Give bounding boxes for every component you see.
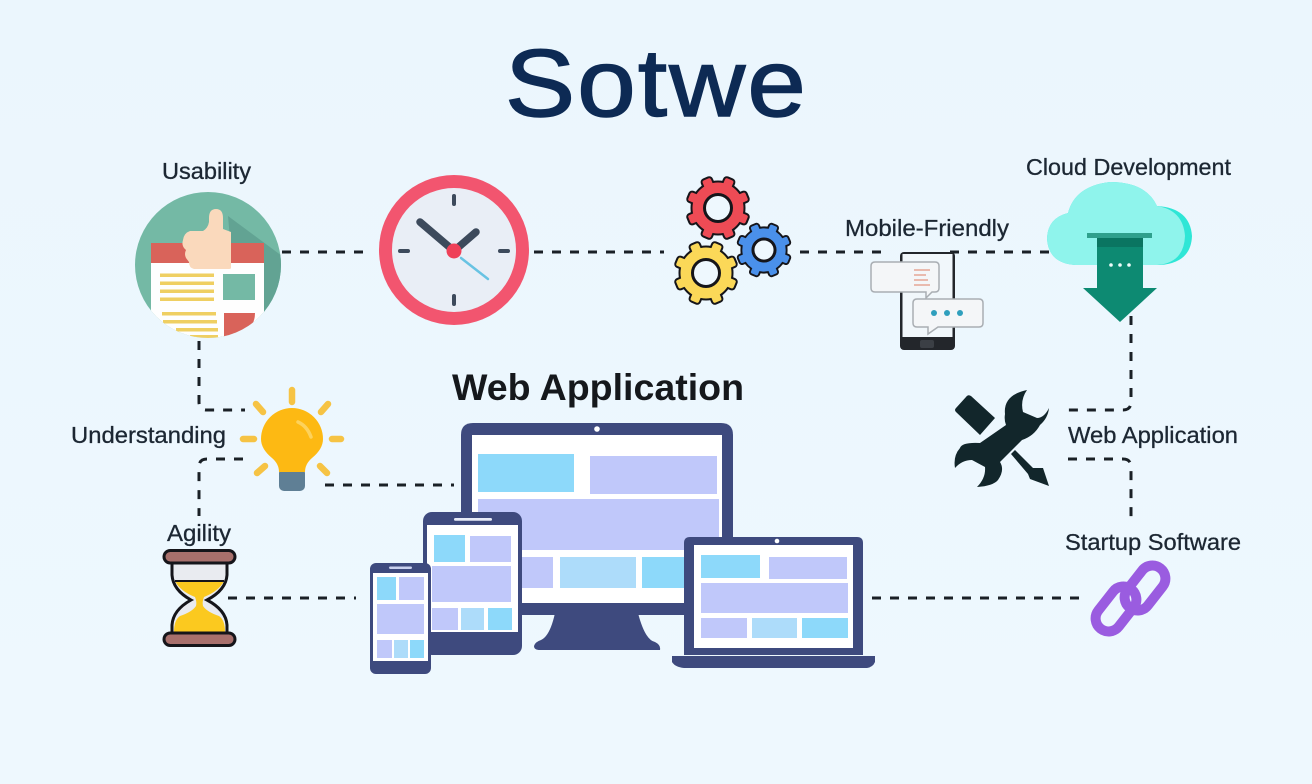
icon: cloud download [1047, 182, 1192, 322]
icon: usability thumbs up on page [135, 192, 285, 343]
icon: responsive devices [370, 423, 875, 674]
title: Sotwe [505, 30, 808, 137]
label: Cloud Development: Cloud Development [1026, 154, 1232, 180]
icon: phone with chat bubbles [871, 252, 983, 350]
red gear [688, 178, 748, 238]
phone [370, 563, 431, 674]
monitor [461, 423, 733, 650]
icon: hourglass [164, 550, 235, 646]
label: Startup Software: Startup Software [1065, 529, 1241, 555]
label: Web Application (right): Web Application [1068, 422, 1238, 448]
yellow gear [676, 243, 736, 303]
icon: clock [379, 175, 529, 325]
laptop [672, 537, 875, 668]
tablet [423, 512, 522, 655]
chat bubble 1 [871, 262, 939, 298]
heading: Web Application: Web Application [452, 367, 744, 408]
icon: purple chain link [1090, 560, 1171, 637]
dashed connectors [199, 252, 1131, 598]
label: Agility: Agility [167, 520, 232, 546]
label: Usability: Usability [162, 158, 252, 184]
icon: light bulb [243, 390, 341, 491]
chat bubble 2 [913, 299, 983, 334]
icon: gears [676, 178, 790, 303]
label: Understanding: Understanding [71, 422, 226, 448]
icon: crossed wrench and screwdriver [955, 390, 1049, 487]
blue gear [738, 224, 790, 276]
label: Mobile-Friendly: Mobile-Friendly [845, 215, 1010, 241]
